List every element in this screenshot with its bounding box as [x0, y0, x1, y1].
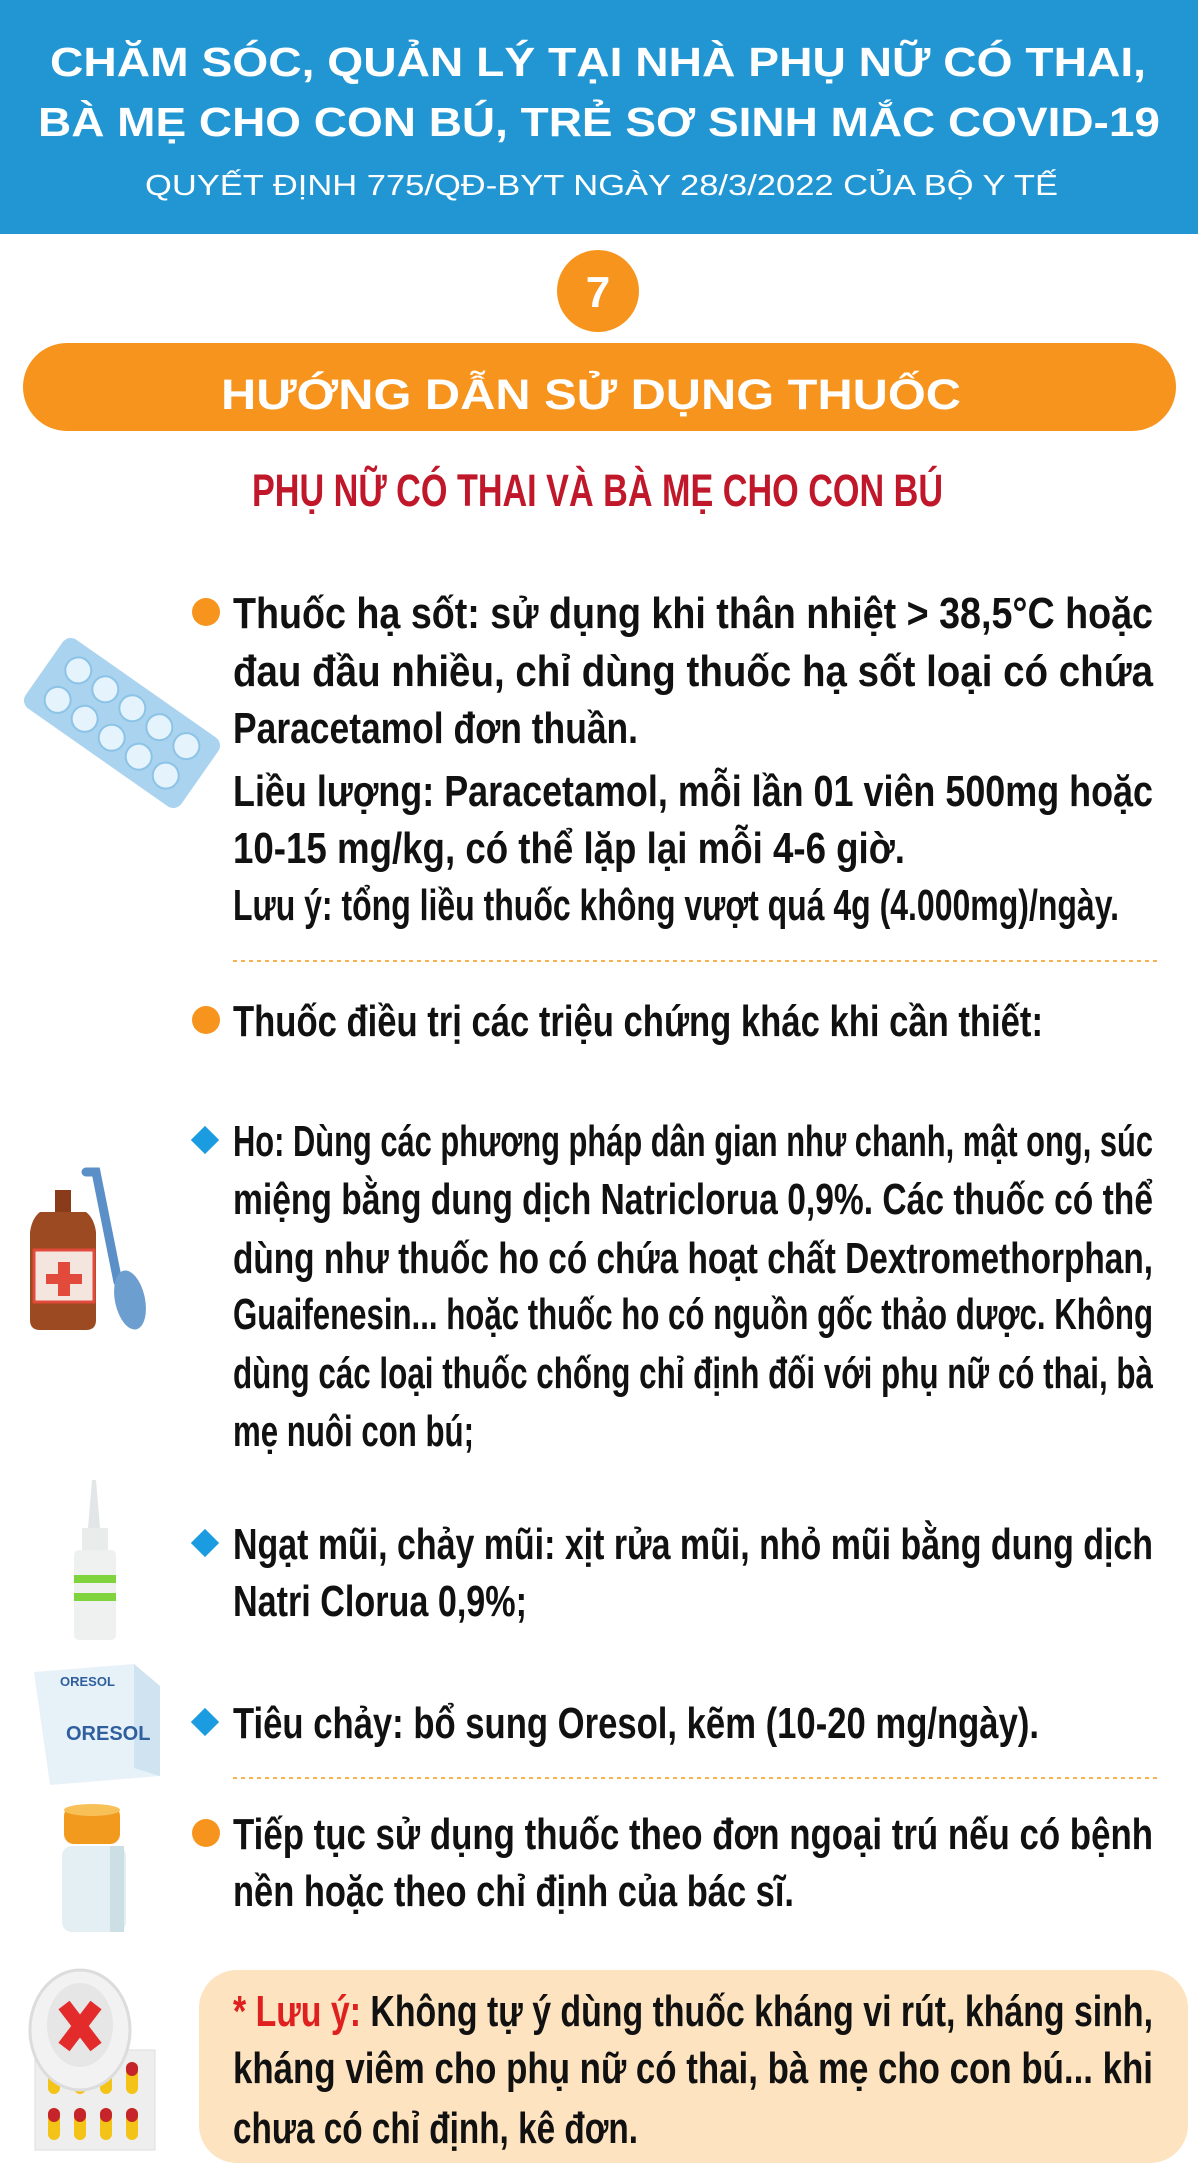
icon: nasal spray [74, 1480, 116, 1640]
icon: oresol box: ORESOL [60, 1674, 115, 1689]
item: cough: mẹ nuôi con bú; [233, 1407, 474, 1456]
icon: oresol box: ORESOL [66, 1723, 150, 1745]
number badge 7: 7 [586, 268, 610, 317]
bullet 1: antipyretic [192, 589, 1153, 930]
bullet 1: antipyretic: Paracetamol đơn thuần. [233, 704, 638, 753]
icon: medicine vial [62, 1804, 126, 1932]
title: CHĂM SÓC, QUẢN LÝ TẠI NHÀ PHỤ NỮ CÓ THAI, [50, 39, 1146, 85]
subheading: PHỤ NỮ CÓ THAI VÀ BÀ MẸ CHO CON BÚ [252, 465, 943, 516]
bullet 3: continue prescription: nền hoặc theo chỉ định của bác sĩ. [233, 1867, 794, 1916]
item: cough [191, 1117, 1153, 1456]
title: BÀ MẸ CHO CON BÚ, TRẺ SƠ SINH MẮC COVID-19 [38, 99, 1160, 145]
icon: no antibiotics [30, 1970, 155, 2150]
subtitle: QUYẾT ĐỊNH 775/QĐ-BYT NGÀY 28/3/2022 CỦA BỘ Y TẾ [145, 168, 1058, 202]
bullet 1: antipyretic: 10-15 mg/kg, có thể lặp lại mỗi 4-6 giờ. [233, 823, 905, 873]
icon: blister pack [20, 634, 224, 812]
bullet 3: continue prescription [192, 1810, 1153, 1916]
callout: note box: chưa có chỉ định, kê đơn. [233, 2104, 638, 2153]
callout: note box [199, 1970, 1188, 2163]
section heading pill: HƯỚNG DẪN SỬ DỤNG THUỐC [221, 370, 961, 419]
number badge 7 [557, 250, 639, 332]
header band [0, 0, 1198, 234]
icon: oresol box [34, 1664, 160, 1785]
section heading pill [23, 343, 1176, 431]
item: stuffy nose [191, 1519, 1153, 1626]
icon: syrup bottle and spoon [30, 1172, 151, 1332]
item: stuffy nose: Natri Clorua 0,9%; [233, 1577, 527, 1626]
title [38, 39, 1160, 145]
